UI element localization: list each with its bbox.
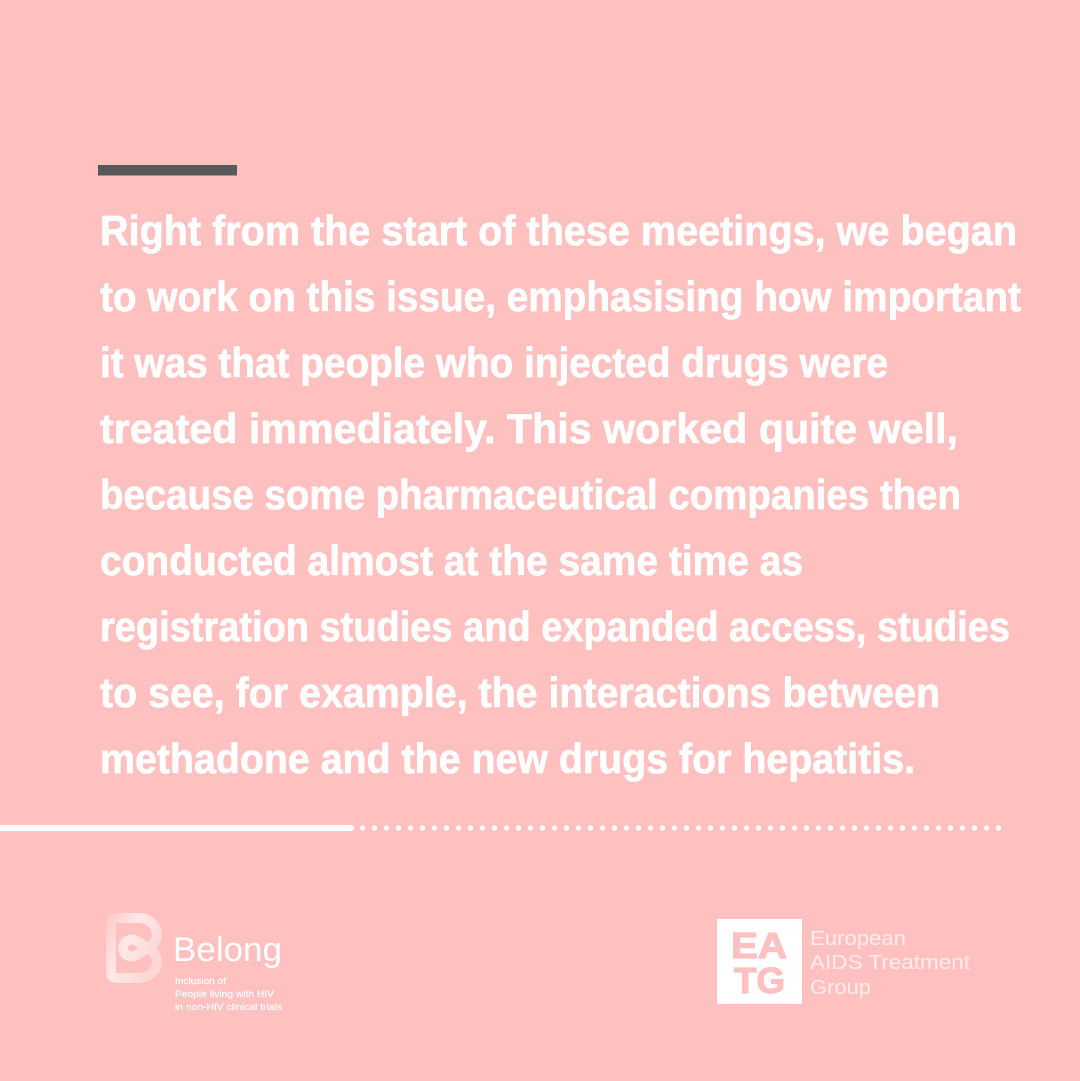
quote text: to see, for example, the interactions between bbox=[100, 669, 940, 716]
quote text: it was that people who injected drugs were bbox=[100, 339, 888, 386]
EATG square letters bbox=[731, 925, 787, 1001]
quote text: registration studies and expanded access, studies bbox=[100, 603, 1010, 650]
icon: Belong B mark bbox=[111, 918, 157, 978]
quote text: Right from the start of these meetings, we began bbox=[100, 207, 1017, 254]
EATG square letters: TG bbox=[734, 960, 785, 1001]
tagline: Belong: Inclusion of bbox=[175, 976, 226, 987]
EATG name: Group bbox=[810, 976, 871, 999]
EATG square letters: EA bbox=[731, 925, 787, 966]
tagline: Belong bbox=[175, 976, 282, 1013]
tagline: Belong: in non-HIV clinical trials bbox=[175, 1002, 282, 1013]
quote text: conducted almost at the same time as bbox=[100, 537, 803, 584]
EATG name bbox=[810, 927, 970, 999]
quote text: treated immediately. This worked quite well, bbox=[100, 405, 958, 452]
quote text: to work on this issue, emphasising how important bbox=[100, 273, 1021, 320]
accent bar bbox=[98, 165, 237, 176]
wordmark: Belong: Belong bbox=[173, 931, 282, 969]
quote text bbox=[100, 207, 1021, 782]
logo: EATG bbox=[717, 919, 970, 1004]
quote text: because some pharmaceutical companies then bbox=[100, 471, 961, 518]
EATG name: European bbox=[810, 927, 906, 950]
quote text: methadone and the new drugs for hepatitis. bbox=[100, 735, 915, 782]
logo: Belong bbox=[111, 918, 282, 1013]
tagline: Belong: People living with HIV bbox=[175, 989, 275, 1000]
EATG name: AIDS Treatment bbox=[810, 951, 970, 974]
EATG white square bbox=[717, 919, 802, 1004]
divider: solid and dotted line bbox=[0, 825, 1000, 831]
